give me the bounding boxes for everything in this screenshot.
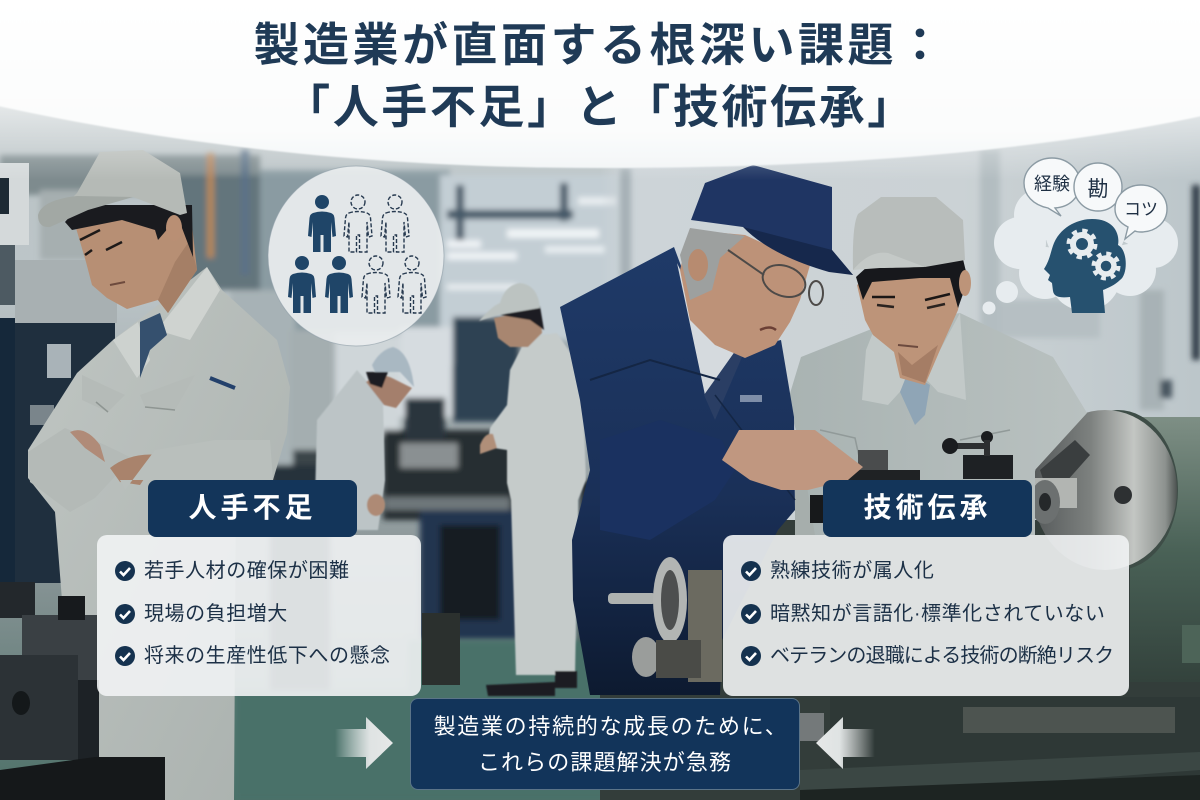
head silhouette: [1044, 219, 1126, 313]
speech bubble: 勘: [1074, 163, 1122, 211]
item: 若手人材の確保が困難: [144, 560, 350, 582]
title: 製造業が直面する根深い課題：: [254, 19, 946, 71]
heading tag: 人手不足: 人手不足: [188, 492, 316, 523]
item: 将来の生産性低下への懸念: [144, 645, 391, 667]
dashed figures: [344, 195, 426, 313]
icon: thought cloud with head and speech bubbles: [982, 157, 1178, 314]
senior worker: [560, 165, 863, 695]
left worker: [28, 150, 290, 800]
icon: people shortage circle: [268, 166, 444, 346]
speech bubble: 経験: 経験: [1034, 174, 1070, 194]
background worker: front: [479, 283, 586, 696]
title: 「人手不足」と「技術伝承」: [284, 81, 916, 133]
heading tag: 人手不足: [148, 480, 357, 537]
machine bottom left: [0, 582, 165, 800]
heading tag: 技術伝承: [823, 480, 1032, 537]
callout: conclusion banner: これらの課題解決が急務: [478, 750, 732, 775]
arrow: right pointing left: [816, 717, 874, 769]
top white curved banner: [0, 0, 1200, 168]
panel: 技術伝承: [723, 480, 1129, 696]
card: 人手不足 list: [97, 535, 421, 696]
lathe machine: [600, 410, 1200, 800]
speech bubble: 経験: [1024, 158, 1080, 216]
tool post and pins: [810, 431, 1013, 523]
arrow: left pointing right: [336, 717, 393, 769]
speech bubble: 勘: 勘: [1088, 178, 1108, 201]
panel: 人手不足: [97, 480, 421, 696]
item: 現場の負担増大: [144, 603, 288, 625]
callout: conclusion banner: 製造業の持続的な成長のために、: [434, 714, 788, 739]
title: [254, 19, 946, 133]
young worker: [788, 197, 1087, 535]
callout: conclusion banner: [410, 698, 800, 790]
top fog: [0, 90, 1200, 180]
background worker: rear: [315, 347, 414, 530]
card: 技術伝承 list: [723, 535, 1129, 696]
item: ベテランの退職による技術の断絶リスク: [770, 645, 1113, 667]
item: 熟練技術が属人化: [770, 560, 934, 582]
right factory interior: [600, 100, 1200, 520]
heading tag: 技術伝承: 技術伝承: [863, 492, 992, 523]
left machines: [0, 163, 29, 245]
speech bubble: コツ: コツ: [1124, 200, 1158, 219]
speech bubble: コツ: [1115, 185, 1167, 239]
left factory interior: [0, 0, 640, 800]
item: 暗黙知が言語化·標準化されていない: [770, 603, 1105, 625]
green floor: [234, 640, 640, 800]
front lathe handwheels: [608, 557, 722, 682]
solid figures: [288, 195, 353, 313]
